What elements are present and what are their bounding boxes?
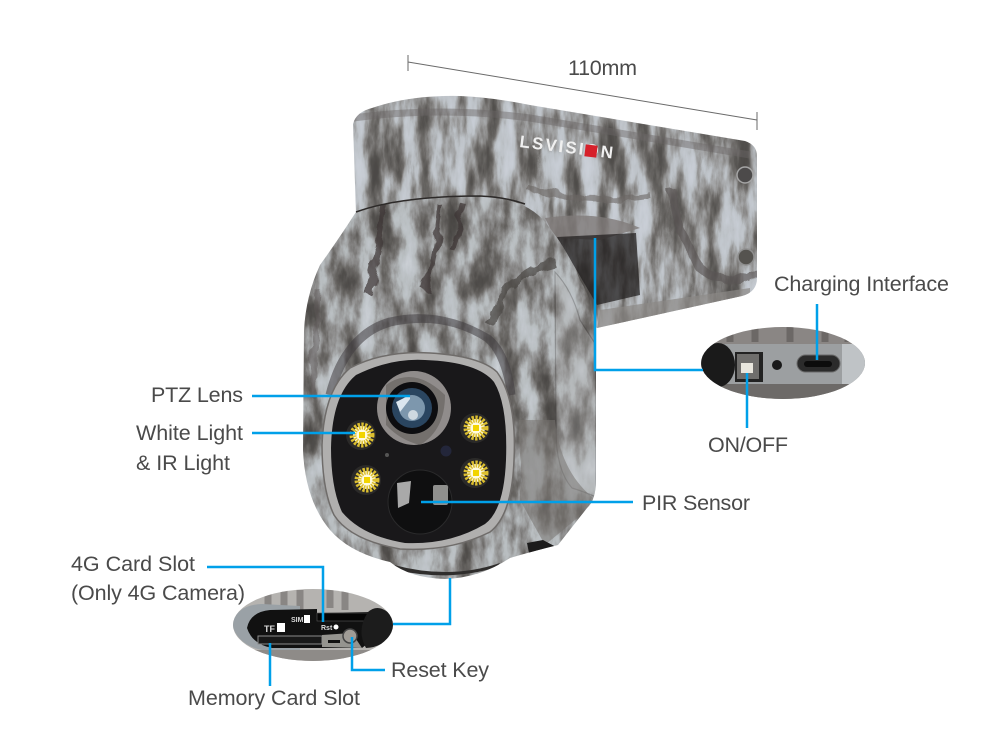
- callout line: memory card slot: [269, 643, 271, 686]
- label: white and IR light: White Light: [136, 421, 243, 445]
- callout line: camera base to card slot inset: [393, 578, 450, 624]
- camera front hood: [321, 314, 522, 550]
- dimension label: 110mm: [568, 56, 637, 80]
- white and IR LED: upper right: [460, 413, 490, 443]
- PTZ lens: [377, 371, 451, 445]
- black front panel: [331, 360, 506, 543]
- label: PTZ lens: PTZ Lens: [151, 383, 243, 407]
- inset: power and charging ports: [700, 325, 866, 401]
- camera wall mount arm: [353, 96, 757, 328]
- camera body dome: [296, 190, 606, 585]
- brand logo: LSVISION: [519, 132, 614, 162]
- inset small print: TF: [264, 624, 275, 634]
- dimension line: 110mm: [408, 55, 757, 130]
- mount screws: [737, 167, 754, 265]
- label: white and IR light: [136, 421, 243, 475]
- label: PIR sensor: PIR Sensor: [642, 491, 750, 515]
- white and IR LED: lower left: [351, 465, 381, 495]
- face ring: [322, 353, 514, 549]
- inset: card slots: [233, 589, 393, 661]
- inset: card slots: SIM: [291, 617, 304, 624]
- recess under the arm: [545, 216, 640, 240]
- label: ON/OFF: ON/OFF: [708, 433, 788, 457]
- white and IR LED: lower right: [460, 458, 490, 488]
- label: reset key: Reset Key: [391, 658, 489, 682]
- callout line: white and IR light: [252, 432, 355, 434]
- callout line: charging interface: [816, 304, 818, 360]
- callout line: 4G card slot: [207, 567, 323, 622]
- white and IR LED: upper left: [346, 420, 376, 450]
- label: white and IR light: & IR Light: [136, 451, 230, 475]
- label: 4G card slot: 4G Card Slot: [71, 552, 195, 576]
- callout line: ON/OFF: [746, 373, 748, 428]
- callout line: mount to port inset: [595, 238, 703, 370]
- label: 4G card slot: [71, 552, 245, 605]
- inset: card slots: Rst: [321, 625, 333, 632]
- PIR sensor: [388, 470, 452, 534]
- label: memory card slot: Memory Card Slot: [188, 686, 360, 710]
- side panel: [555, 272, 596, 497]
- callout line: reset key: [352, 637, 385, 670]
- label: charging interface: Charging Interface: [774, 272, 949, 296]
- light and microphone sensors: [385, 446, 452, 457]
- callout line: PIR sensor: [421, 501, 633, 503]
- label: 4G card slot: (Only 4G Camera): [71, 581, 245, 605]
- callout line: PTZ lens: [252, 395, 410, 397]
